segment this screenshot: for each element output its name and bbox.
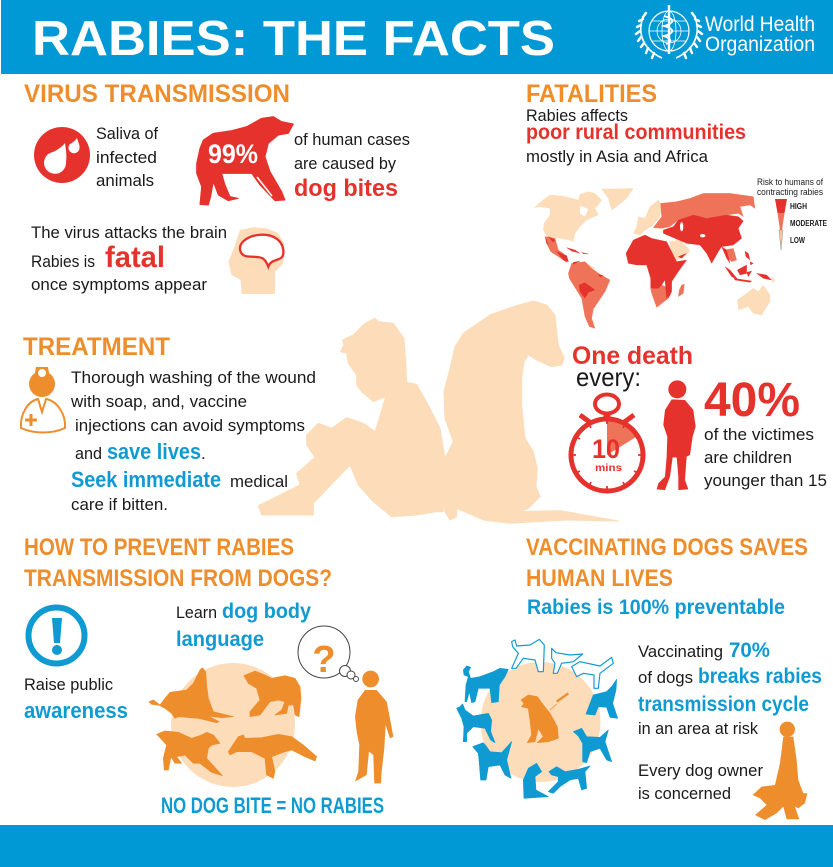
icon: stopwatch: 10 xyxy=(592,434,620,464)
dog bites text: are caused by xyxy=(294,154,396,173)
treatment text: . xyxy=(201,444,206,463)
icon: orange child xyxy=(355,671,393,783)
heading: TREATMENT xyxy=(23,333,170,361)
icon: saliva drops xyxy=(34,127,90,183)
dog silhouette xyxy=(443,301,618,523)
title: RABIES: THE FACTS xyxy=(32,12,555,66)
heading xyxy=(526,534,808,592)
treatment text: save lives xyxy=(107,439,201,464)
saliva text xyxy=(96,124,158,190)
background silhouette: boy and dog xyxy=(258,301,618,523)
subheading: Rabies is 100% preventable xyxy=(527,596,785,619)
vaccination text: Every dog owner xyxy=(638,761,763,780)
treatment text: with soap, and, vaccine xyxy=(70,392,247,411)
awareness text xyxy=(24,675,128,723)
dog circle illustration xyxy=(149,663,317,787)
heading xyxy=(24,534,332,592)
40% text: younger than 15 xyxy=(704,471,827,490)
icon: thought bubble: ? xyxy=(312,639,336,681)
icon: thought bubble xyxy=(298,626,358,682)
panel: treatment xyxy=(21,333,316,514)
map legend: LOW xyxy=(790,236,805,245)
brain text: Rabies is xyxy=(31,252,95,271)
heading: FATALITIES xyxy=(526,80,657,108)
treatment text: medical xyxy=(230,472,288,491)
40% text: of the victimes xyxy=(704,425,814,444)
map legend: contracting rabies xyxy=(757,187,823,198)
WHO name: World Health xyxy=(705,13,815,36)
world map xyxy=(534,188,775,328)
map legend: Risk to humans of xyxy=(757,177,823,188)
vaccination text: in an area at risk xyxy=(638,719,758,738)
one death text xyxy=(572,342,693,392)
one death text: One death xyxy=(572,342,693,370)
icon: red dog with 99%: 99% xyxy=(208,139,258,169)
treatment text: and xyxy=(75,444,102,463)
panel: virus transmission xyxy=(24,80,410,294)
fatalities text xyxy=(526,106,746,166)
dog bites text: of human cases xyxy=(294,130,410,149)
heading: TRANSMISSION FROM DOGS? xyxy=(24,565,332,592)
vaccinated dog circle illustration xyxy=(457,639,618,798)
40% text xyxy=(704,374,827,490)
vaccination text: 70% xyxy=(729,639,770,662)
vaccination text: Vaccinating xyxy=(638,642,723,661)
body language text xyxy=(176,600,311,651)
dog bites text xyxy=(294,130,410,202)
WHO name xyxy=(705,13,815,56)
awareness text: Raise public xyxy=(24,675,113,694)
slogan: NO DOG BITE = NO RABIES xyxy=(161,793,384,818)
icon: stopwatch xyxy=(571,394,643,491)
vaccination text: of dogs xyxy=(638,668,693,687)
WHO name: Organization xyxy=(705,33,815,56)
brain text: fatal xyxy=(105,241,165,274)
saliva text: infected xyxy=(96,148,157,167)
treatment text: Seek immediate xyxy=(71,467,221,492)
vaccination text: is concerned xyxy=(638,784,731,803)
fatalities text: Rabies affects xyxy=(526,106,628,125)
icon: doctor xyxy=(21,367,65,432)
fatalities text: poor rural communities xyxy=(526,121,746,144)
icon: woman walking dog xyxy=(753,722,807,820)
treatment text: injections can avoid symptoms xyxy=(75,416,305,435)
brain text: The virus attacks the brain xyxy=(31,223,227,242)
body language text: Learn xyxy=(176,603,217,622)
40% text: 40% xyxy=(704,374,800,427)
icon: red child xyxy=(657,380,696,490)
panel: how to prevent xyxy=(24,534,393,818)
brain text xyxy=(31,223,227,294)
brain text: once symptoms appear xyxy=(31,275,207,294)
heading: HOW TO PREVENT RABIES xyxy=(24,534,294,561)
header band xyxy=(1,0,833,74)
body language text: language xyxy=(176,628,264,651)
dog bites text: dog bites xyxy=(294,175,398,202)
icon: head with brain xyxy=(228,227,284,294)
treatment text: Thorough washing of the wound xyxy=(71,368,316,387)
vaccination text xyxy=(638,639,822,803)
icon: WHO emblem xyxy=(636,5,702,58)
icon: exclamation xyxy=(28,608,84,664)
heading: HUMAN LIVES xyxy=(526,565,673,592)
saliva text: animals xyxy=(96,171,154,190)
vaccination text: transmission cycle xyxy=(638,693,809,716)
saliva text: Saliva of xyxy=(96,124,158,143)
map legend: HIGH xyxy=(790,202,807,211)
boy silhouette xyxy=(258,318,445,517)
heading: VIRUS TRANSMISSION xyxy=(24,80,290,108)
panel: fatalities xyxy=(526,80,828,328)
map legend xyxy=(757,177,828,250)
body language text: dog body xyxy=(222,600,311,623)
panel: vaccinating dogs xyxy=(457,534,822,820)
one death text: every: xyxy=(576,362,641,392)
treatment text xyxy=(70,368,316,514)
vaccination text: breaks rabies xyxy=(698,665,822,688)
footer band xyxy=(0,825,833,867)
40% text: are children xyxy=(704,448,792,467)
treatment text: care if bitten. xyxy=(71,495,168,514)
icon: red dog with 99% xyxy=(197,117,293,205)
fatalities text: mostly in Asia and Africa xyxy=(526,147,709,166)
icon: stopwatch: mins xyxy=(595,463,623,474)
awareness text: awareness xyxy=(24,698,128,723)
panel: one death statistic xyxy=(571,342,827,491)
